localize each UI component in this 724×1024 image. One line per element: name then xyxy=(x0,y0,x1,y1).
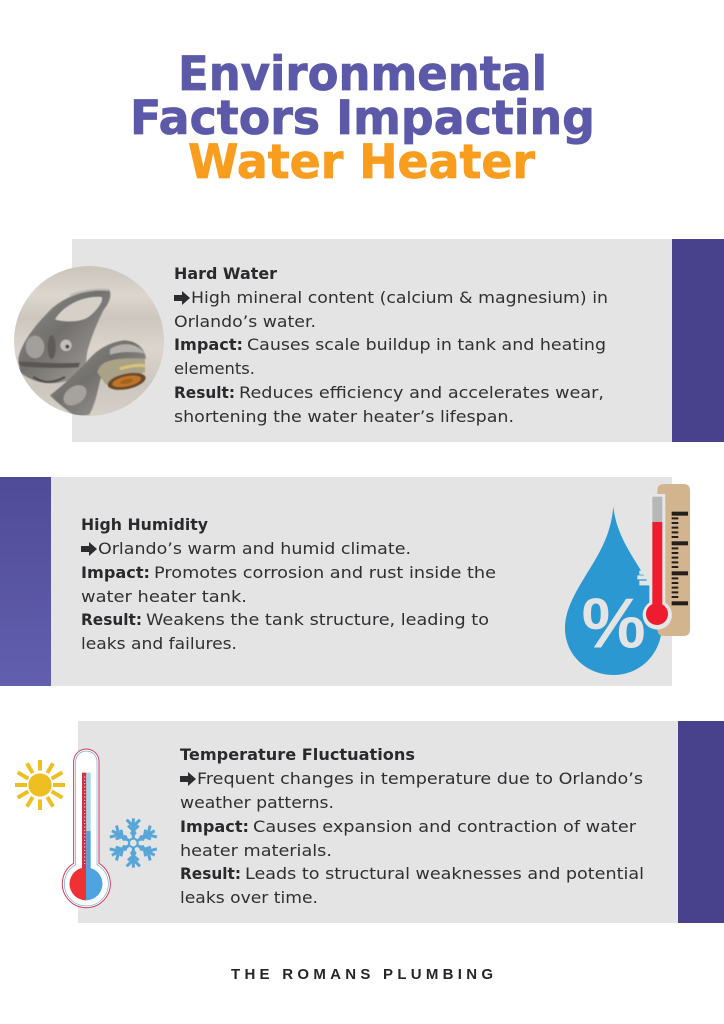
icon: humidity drop and thermometer xyxy=(565,484,690,675)
icon: thermometer, sun and snowflake xyxy=(15,749,158,908)
text block: high humidity: leaks and failures. xyxy=(81,635,237,653)
text block: temperature fluctuations: Impact: xyxy=(180,818,249,836)
title: Water Heater xyxy=(188,135,536,190)
text block: temperature fluctuations: Temperature Fluctuations xyxy=(180,746,415,764)
text block: temperature fluctuations: Causes expansion and contraction of water xyxy=(253,818,637,836)
thermometer tube xyxy=(643,494,672,630)
text block: high humidity: Impact: xyxy=(81,564,150,582)
text block: hard water: High mineral content (calcium & magnesium) in xyxy=(191,289,608,307)
text block: temperature fluctuations: Frequent changes in temperature due to Orlando’s xyxy=(197,770,643,788)
scale ticks xyxy=(672,512,688,605)
title xyxy=(130,47,595,190)
text block: high humidity: Weakens the tank structure, leading to xyxy=(146,611,489,629)
icon: sun xyxy=(15,760,65,810)
percent sign: % xyxy=(582,583,646,662)
icon: water drop xyxy=(565,507,662,675)
text block: temperature fluctuations: Result: xyxy=(180,865,241,883)
text block: hard water: Causes scale buildup in tank and heating xyxy=(247,336,606,354)
icon: corroded faucet photo xyxy=(14,266,164,416)
thermometer board xyxy=(657,484,690,636)
text block: hard water: Orlando’s water. xyxy=(174,313,316,331)
text block: hard water: shortening the water heater’s lifespan. xyxy=(174,408,514,426)
text block: high humidity: High Humidity xyxy=(81,516,208,534)
icon: snowflake xyxy=(109,818,158,868)
footer brand: THE ROMANS PLUMBING xyxy=(231,966,493,983)
text block: high humidity: Promotes corrosion and rust inside the xyxy=(154,564,496,582)
icon: thermometer xyxy=(62,749,110,908)
text block: hard water xyxy=(174,265,608,426)
panel: high humidity xyxy=(0,477,690,686)
text block: temperature fluctuations: Leads to structural weaknesses and potential xyxy=(245,865,644,883)
text block: temperature fluctuations: leaks over time. xyxy=(180,889,318,907)
text block: high humidity: Result: xyxy=(81,611,142,629)
text block: hard water: Result: xyxy=(174,384,235,402)
text block: hard water: elements. xyxy=(174,360,255,378)
text block: high humidity: Orlando’s warm and humid climate. xyxy=(98,540,411,558)
panel: temperature fluctuations xyxy=(15,721,724,923)
text block: temperature fluctuations: heater materials. xyxy=(180,842,332,860)
text block: hard water: Hard Water xyxy=(174,265,277,283)
text block: temperature fluctuations xyxy=(180,746,644,907)
title: Factors Impacting xyxy=(130,91,595,146)
text block: hard water: Reduces efficiency and accelerates wear, xyxy=(239,384,604,402)
text block: temperature fluctuations: weather patterns. xyxy=(180,794,334,812)
panel: hard water xyxy=(14,239,724,442)
title: Environmental xyxy=(178,47,547,102)
text block: high humidity: water heater tank. xyxy=(81,588,247,606)
text block: high humidity xyxy=(81,516,496,653)
text block: hard water: Impact: xyxy=(174,336,243,354)
